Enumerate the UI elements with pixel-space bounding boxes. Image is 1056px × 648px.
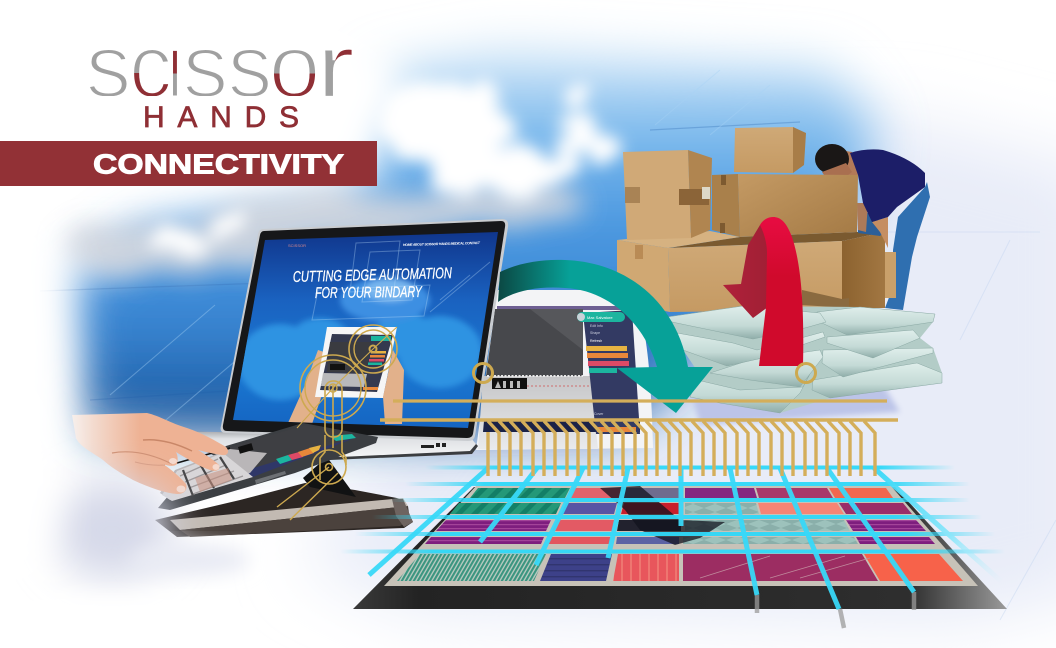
logo: Scissor Hands <box>90 50 352 128</box>
slanted cyan lines <box>369 468 1002 609</box>
white clouds <box>148 78 628 252</box>
stack mass <box>667 306 942 413</box>
software side panel <box>577 310 640 434</box>
leather case <box>155 483 413 537</box>
wordmark: scissor: s <box>86 17 131 117</box>
screen logo and nav: SCISSOR <box>288 243 306 248</box>
hands holding tablet <box>288 350 324 424</box>
navy strip behind comb <box>483 421 640 432</box>
screen headline <box>293 267 452 298</box>
beige tray <box>384 486 978 586</box>
screen headline: CUTTING EDGE AUTOMATION <box>293 265 453 286</box>
gray line shadows <box>757 592 914 628</box>
tablet screen <box>173 425 360 500</box>
software side panel: Cover <box>594 412 604 416</box>
row 2 cells <box>450 503 912 514</box>
laptop screen: HOME ABOUT SCISSOR HANDS MEDICAL CONTACT <box>403 241 481 247</box>
wordmark: scissor: o <box>268 17 321 117</box>
software side panel: Max Salvatore <box>587 315 613 320</box>
wordmark: scissor <box>90 50 352 96</box>
typing hand <box>72 413 228 494</box>
row 1 cells <box>470 488 893 498</box>
back tablet with software panel <box>476 290 653 450</box>
icon: teal curved arrow <box>498 260 713 413</box>
dark arrow reflection <box>600 486 725 545</box>
gold circuit rings and connectors <box>277 325 816 520</box>
top-left haze <box>0 5 400 480</box>
left upper box <box>623 150 712 240</box>
paper stack <box>667 306 942 425</box>
wordmark: scissor: c <box>129 15 172 116</box>
small side box <box>885 252 896 298</box>
software side panel: Edit Info <box>590 324 603 328</box>
tablet on screen <box>315 327 397 398</box>
laptop base <box>165 431 478 460</box>
gray cloud bank <box>60 185 590 276</box>
boxes and worker <box>617 127 930 312</box>
software side panel: Refresh <box>590 339 602 343</box>
gold bus bars and comb connectors <box>380 401 898 476</box>
middle box <box>712 174 858 237</box>
black tray base <box>353 487 1007 609</box>
blueprint outlines <box>312 241 490 320</box>
software side panel: Shape <box>590 331 600 335</box>
cyan grid tray <box>340 466 1007 628</box>
foreground tablet and keyboard case <box>72 413 413 537</box>
stand <box>303 457 356 497</box>
laptop <box>165 219 508 460</box>
row 3 cells <box>436 520 926 531</box>
thumbnails strip <box>492 378 527 389</box>
wordmark: scissor: s <box>228 17 272 117</box>
wordmark: scissor: r <box>316 17 355 117</box>
wordmark: scissor: s <box>182 17 228 117</box>
row 5 cells <box>397 554 963 581</box>
row 4 cells <box>425 537 935 544</box>
horizontal cyan lines <box>340 466 1005 554</box>
hand fog <box>0 370 270 642</box>
top box <box>734 127 806 173</box>
worker <box>815 144 930 310</box>
wordmark: scissor: i <box>167 16 183 117</box>
screen headline: FOR YOUR BINDARY <box>315 284 423 302</box>
on-screen keyboard <box>160 443 267 501</box>
icon: red curved arrow <box>723 217 803 366</box>
wordmark: hands: HANDS <box>143 101 299 134</box>
banner: connectivity: CONNECTIVITY <box>93 148 344 180</box>
large bottom box <box>617 231 885 312</box>
tablet body <box>158 423 378 510</box>
banner: connectivity <box>0 141 377 186</box>
laptop lid <box>221 219 508 441</box>
laptop screen <box>233 232 498 428</box>
